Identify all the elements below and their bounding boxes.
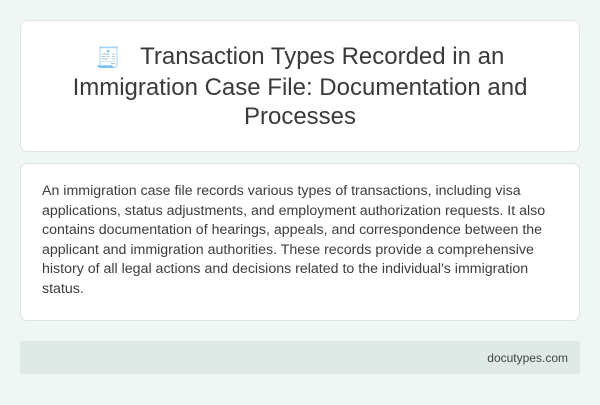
footer: docutypes.com [487, 351, 568, 365]
description text block [20, 163, 580, 321]
footer [20, 341, 580, 374]
title card [20, 20, 580, 152]
description text block: An immigration case file records various types of transactions, including visa applications, status adjustments, and employment authorization requests. It also contains documentation of hearings, appeals, and correspondence between the applicant and immigration authorities. These records provide a comprehensive history of all legal actions and decisions related to the individual's immigration status. [42, 183, 545, 296]
title: 🧾 Transaction Types Recorded in an Immigration Case File: Documentation and Processes [73, 42, 527, 130]
